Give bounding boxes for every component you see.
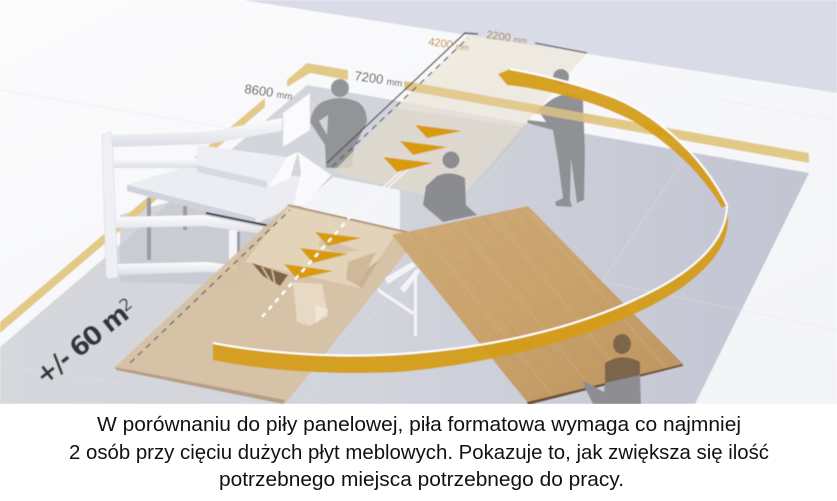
dimension label 7200 mm: 7200 mm	[354, 68, 404, 90]
caption line 2: 2 osób przy cięciu dużych płyt meblowych. Pokazuje to, jak zwiększa się ilość	[69, 441, 769, 464]
solid oak board	[392, 206, 683, 405]
machine legs on right	[378, 262, 420, 336]
person: right	[527, 69, 585, 207]
translucent upper sheet	[333, 35, 587, 203]
machine wedge	[294, 152, 331, 206]
translucent lower sheet	[115, 205, 420, 404]
feed arrows upper	[383, 125, 462, 172]
caption	[0, 404, 837, 501]
caption line 3: potrzebnego miejsca potrzebnego do pracy.	[219, 468, 624, 491]
fence bar	[206, 213, 275, 227]
area label: +/- 60 m	[30, 299, 135, 391]
area label: 2	[116, 294, 137, 316]
person: left behind machine	[310, 79, 367, 168]
back wall	[243, 0, 837, 93]
yellow strip over sheet	[404, 81, 600, 125]
machine	[102, 93, 400, 279]
person: centre	[423, 152, 477, 222]
machine legs	[147, 198, 240, 270]
rotation arrow ribbon	[213, 69, 728, 373]
dimension label 8600 mm: 8600 mm	[244, 81, 294, 103]
caption line 1: W porównaniu do piły panelowej, piła formatowa wymaga co najmniej	[97, 413, 741, 436]
yellow dimension strip	[0, 63, 809, 333]
dark dimension lines	[130, 33, 587, 363]
person: bottom	[583, 334, 641, 404]
machine floor shadow	[120, 190, 290, 285]
workpiece steps	[350, 257, 383, 288]
blade guard	[293, 282, 328, 326]
machine carriage	[197, 145, 287, 188]
saw opening	[252, 263, 288, 286]
machine table	[127, 163, 310, 224]
dimension label 2200 mm: 2200 mm	[486, 29, 528, 47]
dimension label 4200 mm: 4200 mm	[428, 36, 470, 54]
feed guide rails	[350, 163, 415, 217]
outrigger end panel	[283, 93, 310, 147]
outrigger post	[102, 132, 118, 279]
feed arrows lower	[284, 232, 361, 279]
outrigger tubes	[112, 118, 282, 275]
floor footprint	[0, 85, 809, 404]
cut line	[262, 217, 350, 317]
